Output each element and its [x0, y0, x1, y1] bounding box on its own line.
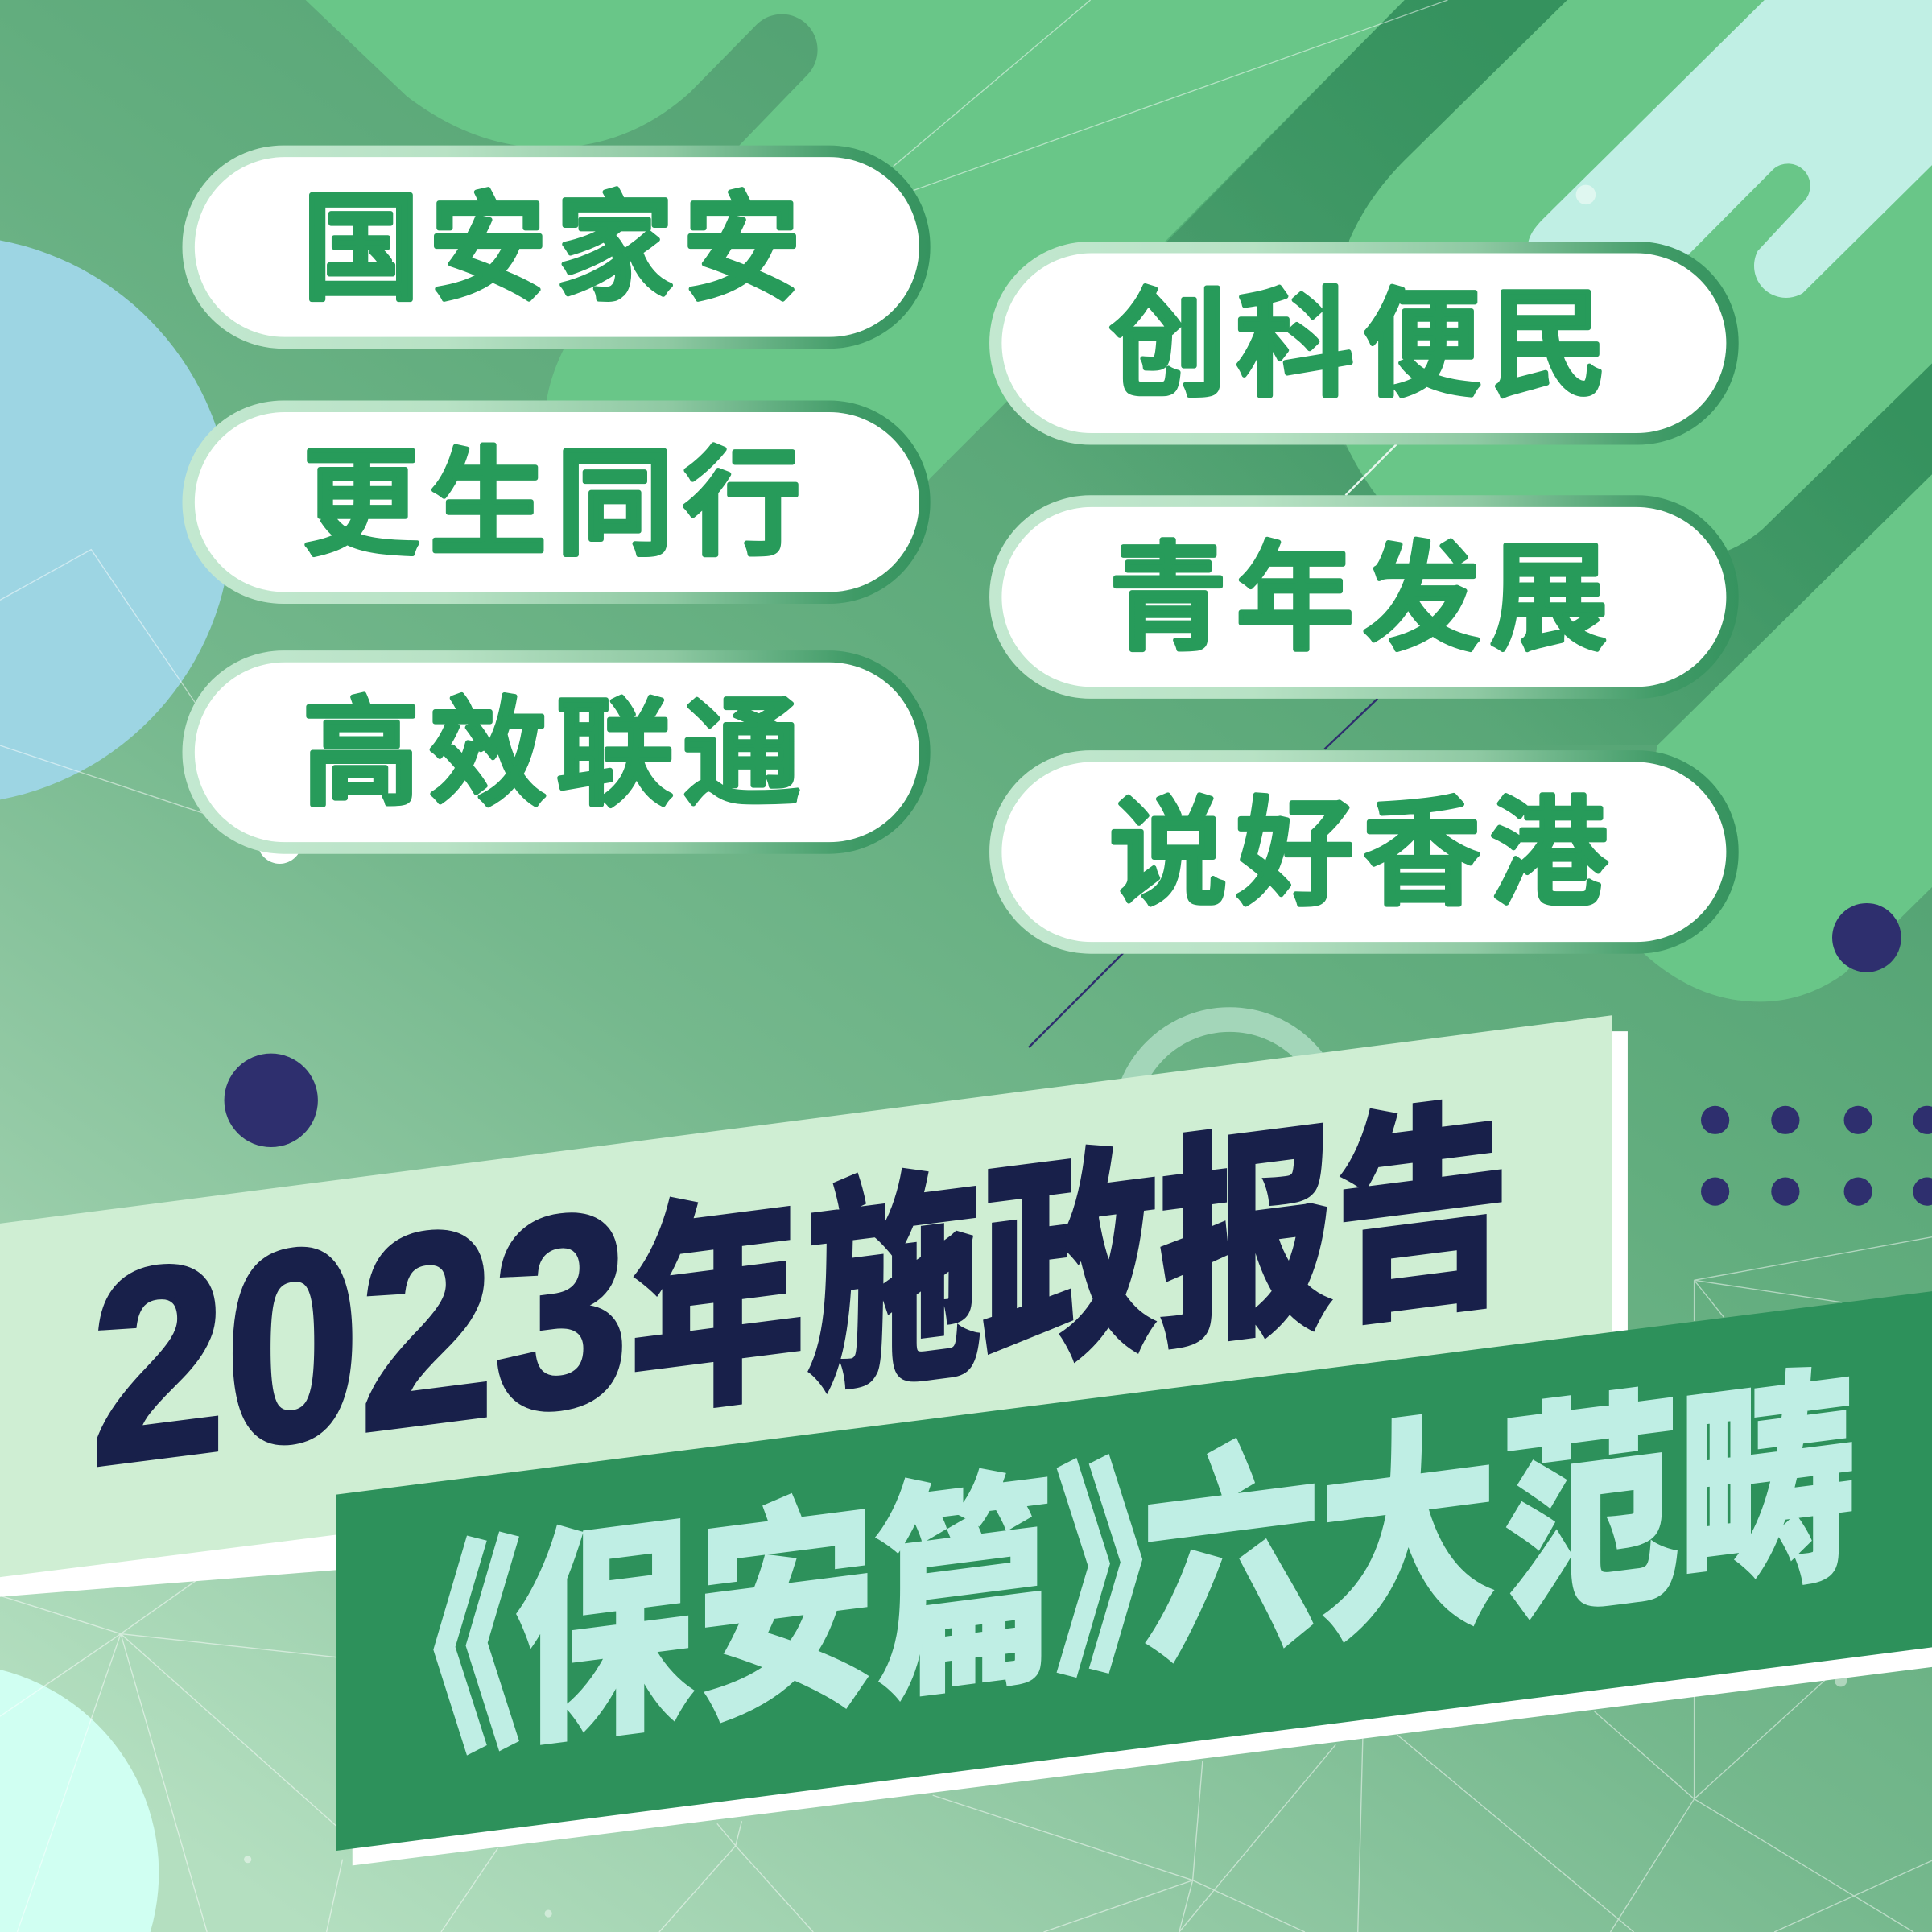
decorative shape: translucent ring [1125, 1020, 1335, 1230]
decorative shape: blue circle [0, 240, 232, 799]
pill: 高效联通 [183, 650, 931, 854]
decorative shape: white dot behind pill [258, 819, 302, 864]
decorative shape: top green blob [306, 0, 1405, 592]
pill: 说好香港 [989, 750, 1739, 954]
decorative shape: navy circle left [225, 1054, 318, 1147]
decorative shape: lower dark band [1356, 364, 1932, 745]
pill: 青年发展: 青年发展 [1109, 503, 1616, 674]
pill: 创科便民 [989, 242, 1739, 445]
title text: 2023年施政报告: 2023 [91, 1151, 629, 1522]
pill: 说好香港: 说好香港 [1109, 758, 1616, 929]
title panel: light green with white shadow [0, 1015, 1628, 1597]
pill: 高效联通: 高效联通 [302, 658, 810, 829]
subtitle panel: dark green with white shadow [336, 1291, 1932, 1865]
pill: 创科便民: 创科便民 [1109, 250, 1616, 420]
decorative shape: right green blob [1339, 0, 1932, 560]
pill: 更生同行 [183, 400, 931, 604]
subtitle text: 《保安篇》六大范畴: 《保安篇》六大范畴 [343, 1350, 1856, 1797]
decorative dot grid [1701, 1106, 1932, 1206]
pill: 国安家安: 国安家安 [302, 154, 810, 324]
pill: 青年发展 [989, 495, 1739, 699]
pill: 更生同行: 更生同行 [302, 409, 810, 580]
decorative shape: mint capsule [1528, 0, 1932, 298]
faint dots [244, 1674, 1847, 1918]
decorative shape: small mint dot [1576, 185, 1596, 204]
title text: 2023年施政报告 [91, 1082, 1510, 1522]
title text: 2023年施政报告: 年施政报告 [630, 1082, 1510, 1444]
decorative shape: lower right green blob [1639, 474, 1932, 1001]
pill: 国安家安 [183, 146, 931, 349]
decorative shape: navy circle right [1832, 903, 1901, 972]
decorative shape: dark diagonal band [931, 0, 1567, 518]
decorative shape: mint circle [0, 1670, 159, 1932]
connector lines [1029, 444, 1397, 1047]
